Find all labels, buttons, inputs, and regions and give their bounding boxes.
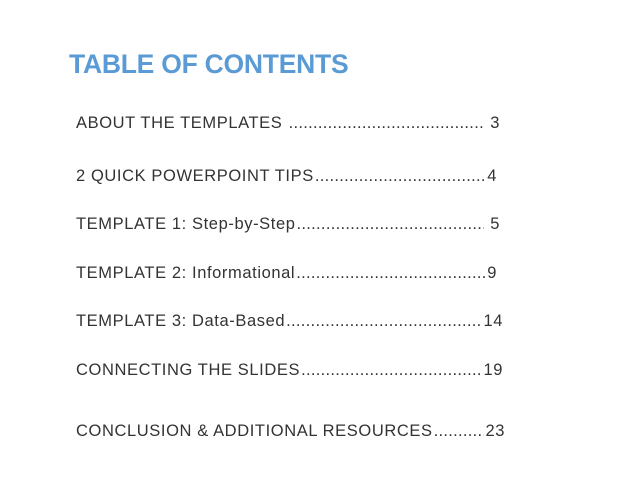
entry: template 1: TEMPLATE 1: Step-by-Step — [76, 214, 296, 232]
entry: quick tips: 4 — [487, 166, 497, 184]
entry: template 2 — [76, 264, 497, 282]
entry: conclusion: CONCLUSION & ADDITIONAL RESOURCES — [76, 422, 433, 440]
entry: template 2: 9 — [487, 264, 497, 282]
entry: template 2: TEMPLATE 2: Informational — [76, 264, 295, 282]
entry: quick tips: 2 QUICK POWERPOINT TIPS — [76, 166, 314, 184]
entry: template 3 — [76, 312, 503, 330]
entry: connecting the slides: 19 — [483, 360, 503, 378]
entry: template 1 — [76, 214, 500, 232]
entry: quick tips — [76, 166, 497, 184]
entry: connecting the slides: CONNECTING THE SLIDES — [76, 360, 300, 378]
entry: about the templates — [76, 114, 500, 132]
entry: about the templates: ABOUT THE TEMPLATES — [76, 114, 282, 132]
entry: template 3: TEMPLATE 3: Data-Based — [76, 312, 285, 330]
entry: conclusion: 23 — [485, 422, 505, 440]
entry: template 1: 5 — [490, 214, 500, 232]
title: TABLE OF CONTENTS — [69, 49, 348, 79]
entry: about the templates: 3 — [490, 114, 500, 132]
entry: template 3: 14 — [483, 312, 503, 330]
entry: connecting the slides — [76, 360, 503, 378]
